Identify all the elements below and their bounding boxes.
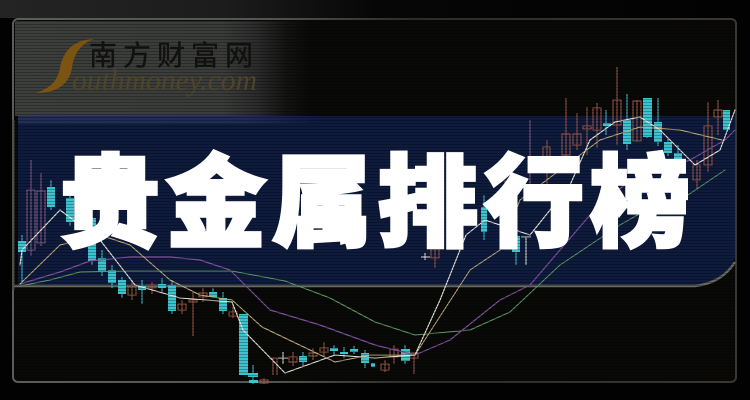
logo swoosh S	[36, 39, 94, 93]
logo backdrop	[15, 21, 310, 116]
purple average line	[20, 130, 735, 355]
candlestick chart	[18, 67, 730, 384]
pink candles	[27, 120, 530, 256]
title: 贵金属排行榜	[60, 122, 696, 267]
white cross candles	[278, 237, 531, 364]
yellow average line	[20, 127, 722, 362]
band bottom edge	[13, 262, 735, 286]
cyan candle wicks	[22, 94, 678, 384]
blue band	[18, 116, 735, 286]
cyan candle bodies	[18, 98, 730, 383]
logo chinese name: 南方财富网	[89, 34, 259, 74]
band top highlight	[18, 116, 318, 124]
white average line	[20, 110, 735, 373]
moving average lines	[20, 110, 735, 373]
red candles	[128, 67, 722, 384]
logo domain: outhmoney.com	[72, 65, 257, 97]
green average line	[20, 170, 725, 335]
band left edge	[12, 120, 14, 290]
logo	[36, 34, 259, 97]
top glow band	[0, 0, 750, 18]
